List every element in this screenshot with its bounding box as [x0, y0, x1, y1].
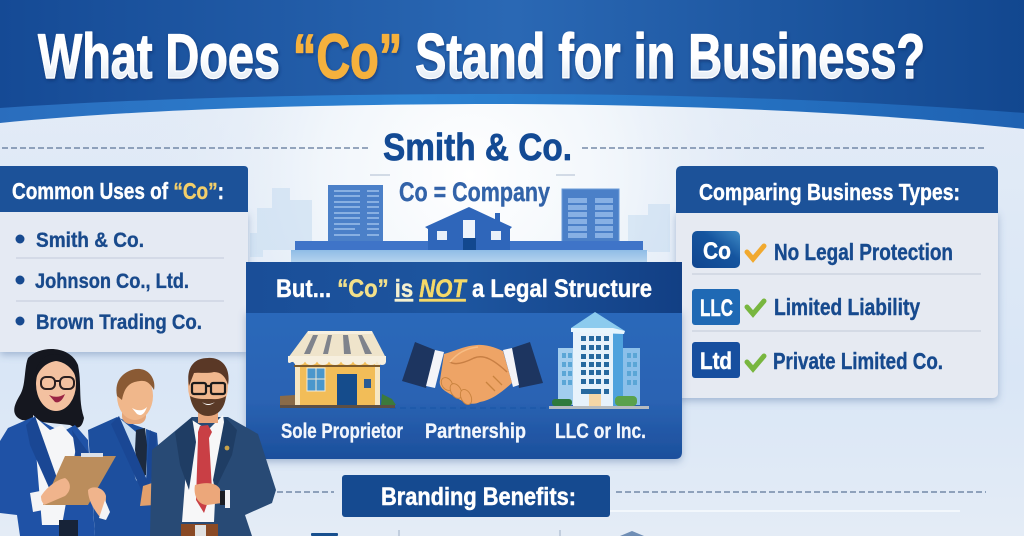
list item: Brown Trading Co.: Brown Trading Co.: [36, 311, 202, 334]
row: Ltd: Ltd: [700, 348, 732, 375]
row: Co: No Legal Protection: [774, 239, 953, 265]
icon: office building: [549, 312, 649, 409]
panel heading text: But... “Co” is NOT a Legal Structure: [276, 275, 652, 303]
label: Sole Proprietor: Sole Proprietor: [281, 420, 403, 443]
cropped bottom icons: [311, 530, 644, 536]
row: Co: [692, 231, 953, 268]
panel: common uses: [0, 166, 248, 352]
person: woman: [0, 349, 116, 536]
panel header: legal structure: [246, 262, 682, 313]
branding benefits heading: [342, 475, 610, 517]
panel: legal structure: [246, 262, 682, 459]
panel heading text: Common Uses of “Co”:: [12, 178, 224, 204]
header banner: [0, 0, 1024, 129]
icon: storefront: [280, 331, 396, 408]
list item: Johnson Co., Ltd.: Johnson Co., Ltd.: [35, 270, 189, 293]
subheading: Co = Company: Co = Company: [399, 177, 550, 207]
row: LLC: [692, 289, 920, 325]
panel header: common uses: [0, 166, 248, 212]
panel: comparing business types: [676, 166, 998, 398]
row: LLC: Limited Liability: [774, 294, 920, 320]
skyline illustration: [250, 185, 670, 262]
panel header: comparing: [676, 166, 998, 213]
dashed rule: top left: [2, 147, 370, 149]
icon: house: [425, 207, 512, 250]
dashed rule: branding left: [277, 491, 334, 493]
label: LLC or Inc.: LLC or Inc.: [555, 420, 646, 443]
row: Ltd: [692, 342, 943, 378]
panel heading text: Comparing Business Types:: [699, 179, 960, 205]
branding benefits heading: Branding Benefits:: [381, 483, 576, 511]
row: Ltd: Private Limited Co.: [773, 348, 943, 374]
people illustration: [0, 349, 276, 536]
label: Partnership: Partnership: [425, 420, 526, 443]
short accent rules: [370, 174, 575, 176]
row: LLC: LLC: [700, 295, 733, 322]
row: Co: Co: [703, 238, 731, 265]
person: middle man: [88, 369, 165, 536]
company name heading: Smith & Co.: [383, 127, 572, 169]
person: right man: [150, 358, 276, 536]
dashed rule: top right: [582, 147, 985, 149]
icon: handshake: [402, 342, 543, 406]
dashed rule: branding right: [616, 491, 986, 493]
list item: Smith & Co.: Smith & Co.: [36, 229, 144, 252]
